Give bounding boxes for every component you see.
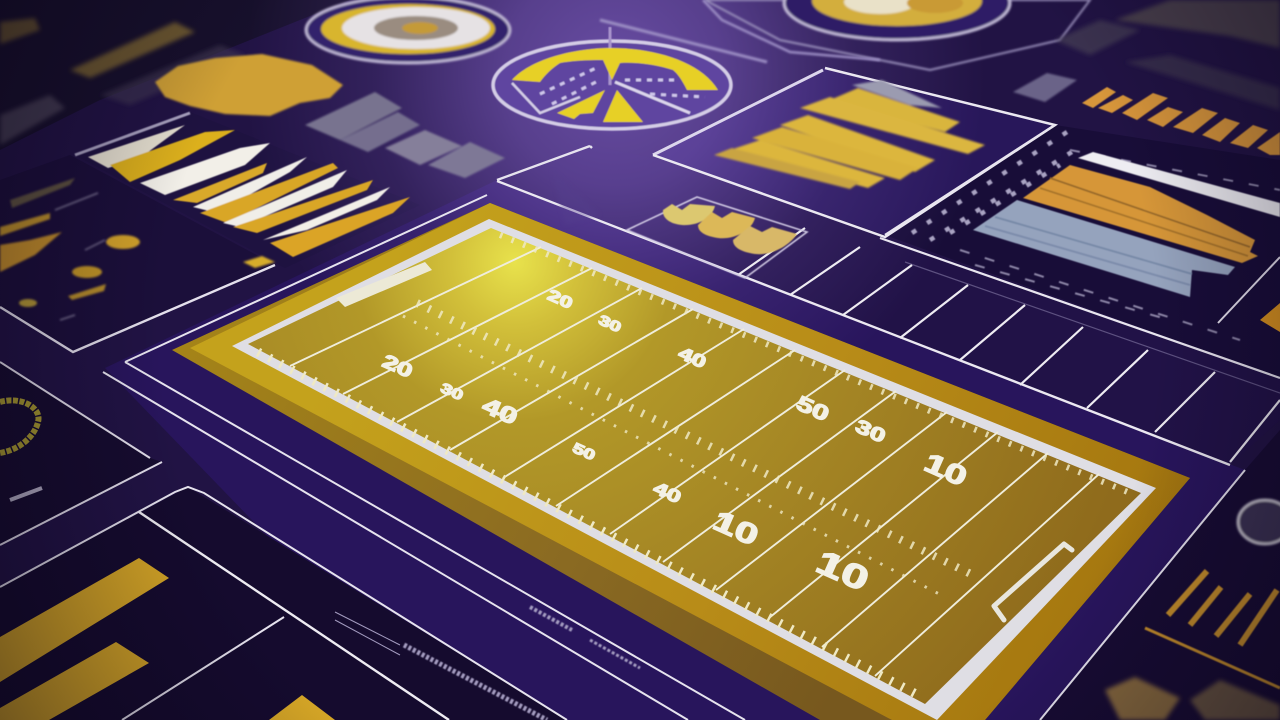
panel: football field <box>172 203 1190 720</box>
field numbers <box>379 286 971 599</box>
field white border <box>232 219 1156 720</box>
panel: top left faint charts <box>0 18 245 145</box>
field numbers: 40 <box>676 343 709 372</box>
panel: yard table <box>497 146 1280 465</box>
chart: small dashes <box>960 150 1280 340</box>
panel: far left circle <box>0 362 162 545</box>
field numbers: 20 <box>379 350 416 383</box>
field turf <box>248 228 1141 704</box>
panel: bottom right detail <box>1040 430 1280 720</box>
chart: grey bars <box>973 200 1235 297</box>
field dark underside <box>172 203 1190 720</box>
icon: grey square <box>1013 73 1077 102</box>
panel: gold bar chart <box>653 68 1055 237</box>
yard lines <box>290 247 1099 676</box>
table column lines <box>738 228 1280 462</box>
field numbers: 10 <box>920 448 971 493</box>
panel: top center pie chart <box>493 0 880 155</box>
chart: yellow bar two <box>0 642 149 720</box>
field numbers: 30 <box>852 415 889 448</box>
panel: bottom left bars <box>0 487 640 720</box>
panel: top right faint bars <box>1055 0 1280 110</box>
chart: pie ellipse <box>493 27 731 129</box>
end zone bracket <box>994 544 1072 620</box>
chart: yellow and white fan bars <box>75 113 410 257</box>
panel: top right ellipse badge <box>705 0 1090 70</box>
small legend lines <box>335 607 640 720</box>
panel: top ellipse badge <box>306 0 510 63</box>
chart: blurred boxes <box>1105 677 1280 720</box>
field numbers: 30 <box>438 380 466 404</box>
field numbers: 50 <box>570 440 598 464</box>
chart: gold horizontal bars <box>714 80 985 189</box>
chart: grey bars <box>305 92 505 178</box>
chart: dot grid <box>912 130 1075 240</box>
chart: orange bars <box>1023 165 1258 263</box>
chart: yellow bar three <box>269 695 335 720</box>
field top left label <box>336 262 432 307</box>
chart: orange tick bars top right <box>1082 87 1280 155</box>
field numbers: 20 <box>545 286 575 313</box>
field numbers: 40 <box>479 392 522 430</box>
field numbers: 10 <box>811 542 875 599</box>
chart: white bar <box>1078 152 1280 217</box>
faint triangle <box>552 170 600 225</box>
icon: gold ring fragment <box>0 400 39 453</box>
field numbers: 30 <box>596 312 624 336</box>
hash marks <box>258 235 1135 696</box>
chart: yellow bar one <box>0 558 169 682</box>
chart: tick bars <box>1145 571 1280 688</box>
panel: lower board outlines <box>103 195 745 720</box>
field numbers: 40 <box>651 478 684 507</box>
icon: grey ring <box>1238 500 1280 544</box>
panel: right stacked bars <box>885 125 1280 340</box>
field outer gold <box>190 203 1190 720</box>
table gold glyphs <box>627 197 807 278</box>
field numbers: 50 <box>793 392 832 426</box>
chart: gold scatter marks <box>0 178 275 320</box>
field numbers: 10 <box>708 504 764 552</box>
chart: gold blob <box>155 54 343 116</box>
panel: left dark chart <box>0 178 275 352</box>
